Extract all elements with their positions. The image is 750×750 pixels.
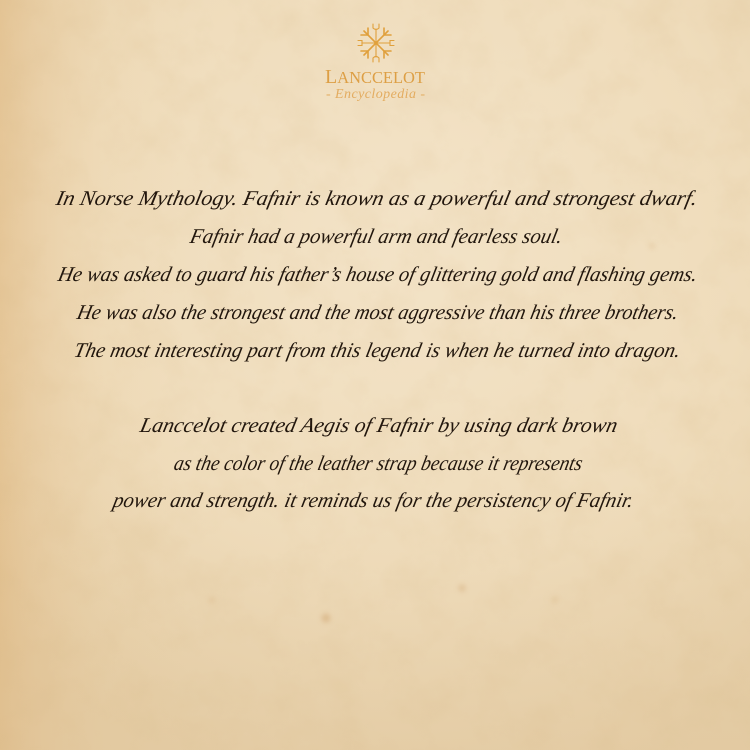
logo subtitle: - Encyclopedia - bbox=[326, 87, 425, 102]
text block: Fafnir legend: The most interesting part from this legend is when he turned into dragon. bbox=[72, 338, 683, 362]
text block: Fafnir legend: He was asked to guard his father’s house of glittering gold and flashing gems. bbox=[55, 262, 700, 286]
text block: Aegis of Fafnir: power and strength. it reminds us for the persistency of Fafnir. bbox=[109, 488, 636, 512]
text block: Aegis of Fafnir: Lanccelot created Aegis of Fafnir by using dark brown bbox=[137, 413, 620, 437]
text block: Fafnir legend bbox=[53, 186, 700, 362]
text block: Fafnir legend: Fafnir had a powerful arm and fearless soul. bbox=[187, 224, 565, 248]
logo wordmark: LANCCELOT bbox=[325, 66, 425, 88]
text block: Fafnir legend: In Norse Mythology. Fafnir is known as a powerful and strongest dwarf. bbox=[53, 186, 700, 210]
text block: Fafnir legend: He was also the strongest and the most aggressive than his three brothers. bbox=[74, 300, 681, 324]
text block: Aegis of Fafnir: as the color of the leather strap because it represents bbox=[172, 451, 585, 475]
text block: Aegis of Fafnir bbox=[109, 413, 636, 512]
icon: Lanccelot crossed-arrows emblem bbox=[358, 24, 394, 62]
